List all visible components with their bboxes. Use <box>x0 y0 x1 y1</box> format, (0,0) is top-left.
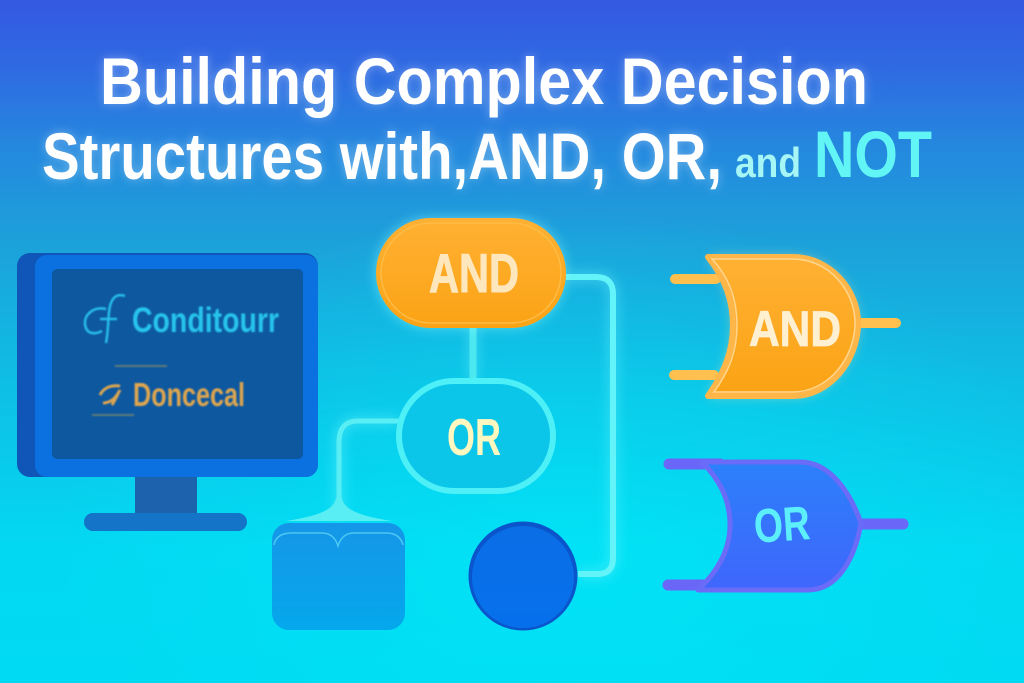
connector: AND to OR <box>470 328 476 380</box>
gate wires <box>674 279 896 375</box>
OR gate: OR <box>752 497 812 554</box>
title: Building Complex Decision <box>100 44 868 118</box>
OR node: OR <box>447 409 501 467</box>
title <box>42 44 932 193</box>
AND node: AND <box>429 242 519 304</box>
title: NOT <box>814 117 932 191</box>
gate wires <box>668 464 903 585</box>
title: and <box>735 139 801 186</box>
flowchart <box>272 218 613 630</box>
title: Building Complex Decision <box>100 44 868 118</box>
monitor stand <box>135 475 197 515</box>
monitor base <box>84 513 247 531</box>
monitor screen <box>52 269 303 459</box>
screen text: Doncecal: Doncecal <box>133 376 245 413</box>
monitor frame <box>17 253 318 477</box>
screen text: Conditourr: Conditourr <box>132 301 279 340</box>
screen text: Doncecal <box>92 365 245 416</box>
AND gate: AND <box>749 301 841 357</box>
connector glow <box>339 277 613 574</box>
title: Structures with,AND, OR, <box>42 119 722 193</box>
connector: OR to block <box>286 421 400 521</box>
title: Structures with,AND, OR, <box>42 119 722 193</box>
AND node <box>376 218 566 328</box>
OR gate <box>668 462 903 590</box>
monitor <box>17 253 318 531</box>
screen text: Conditourr <box>85 295 279 343</box>
blue block <box>272 523 405 630</box>
connector: AND to circle <box>566 277 613 574</box>
blue circle <box>468 522 578 630</box>
OR node <box>399 381 553 491</box>
AND gate <box>674 257 896 396</box>
